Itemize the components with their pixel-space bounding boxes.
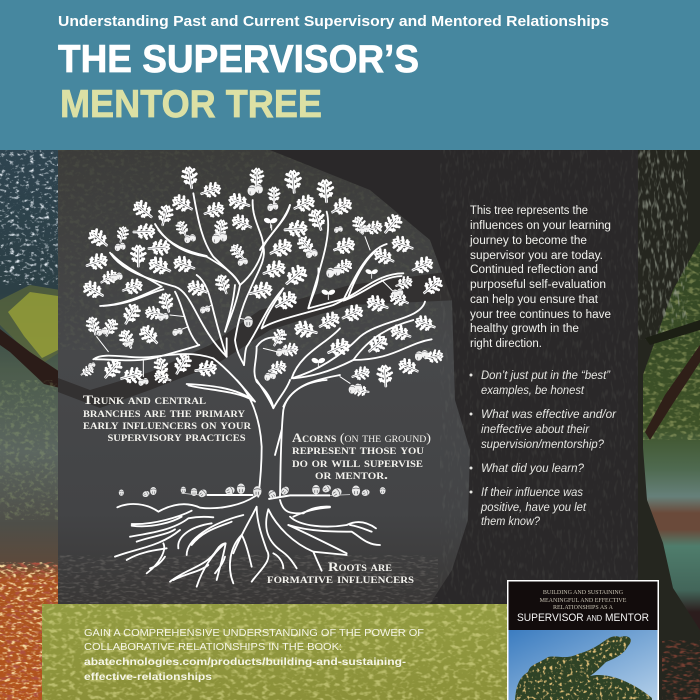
intro text block: This tree represents the <box>470 205 588 217</box>
reflection questions list: What did you learn? <box>481 463 585 475</box>
header band <box>0 0 700 150</box>
intro text block <box>469 205 611 350</box>
book cover: RELATIONSHIPS AS A <box>553 605 614 611</box>
book cover: SUPERVISOR AND MENTOR <box>517 612 649 624</box>
label: trunk and central branches <box>83 392 252 444</box>
label: acorns <box>292 430 431 482</box>
book cover: MEANINGFUL AND EFFECTIVE <box>540 598 627 604</box>
reflection questions list: ineffective about their <box>481 424 590 436</box>
tree illustration <box>78 166 445 587</box>
intro text block: healthy growth in the <box>470 323 579 335</box>
book cover: BUILDING AND SUSTAINING <box>543 590 624 596</box>
label: trunk and central branches: early influencers on your <box>83 417 252 432</box>
background photo: right forest edge <box>638 150 700 700</box>
call-to-action text: GAIN A COMPREHENSIVE UNDERSTANDING OF THE POWER OF <box>84 627 424 639</box>
call-to-action text <box>84 627 424 683</box>
roots <box>115 495 380 587</box>
reflection questions list: supervision/mentorship? <box>481 439 605 451</box>
reflection questions list: them know? <box>481 516 541 528</box>
call-to-action text: abatechnologies.com/products/building-and-sustaining- <box>84 656 407 668</box>
label: trunk and central branches: branches are the primary <box>83 405 246 420</box>
label: acorns: do or will supervise <box>292 455 423 470</box>
intro text block: purposeful self-evaluation <box>470 279 606 291</box>
label: roots: Roots are <box>328 559 392 574</box>
call-to-action text: effective-relationships <box>84 671 212 683</box>
intro text block: can help you ensure that <box>470 294 599 306</box>
intro text block: right direction. <box>470 338 542 350</box>
book cover tree photo <box>515 636 652 700</box>
label: acorns: represent those you <box>292 442 425 457</box>
background photo: left forest edge <box>0 150 60 700</box>
reflection questions list: Don’t just put in the “best” <box>481 370 611 382</box>
label: roots: formative influencers <box>267 571 414 586</box>
intro text block: your tree continues to have <box>470 309 611 321</box>
intro text block: influences on your learning <box>470 220 611 232</box>
label: trunk and central branches: supervisory practices <box>108 429 246 444</box>
intro text block: Continued reflection and <box>470 264 598 276</box>
reflection questions list: What was effective and/or <box>481 409 617 421</box>
label: acorns: or mentor. <box>315 467 388 482</box>
acorns in the canopy <box>88 183 430 395</box>
label: acorns: Acorns (on the ground) <box>292 430 431 445</box>
label: trunk and central branches: Trunk and central <box>83 392 206 407</box>
reflection questions list: positive, have you let <box>480 502 587 514</box>
subtitle: Understanding Past and Current Supervisory and Mentored Relationships <box>58 13 609 30</box>
intro text block: journey to become the <box>469 235 587 247</box>
branches and trunk <box>93 193 432 497</box>
oak leaves <box>78 166 445 397</box>
call-to-action panel <box>42 604 508 700</box>
title line 2: MENTOR TREE <box>60 83 322 126</box>
reflection questions list <box>470 370 617 528</box>
dark translucent panel over the forest <box>58 150 640 605</box>
reflection questions list: examples, be honest <box>481 385 585 397</box>
intro text block: supervisor you are today. <box>470 250 603 262</box>
reflection questions list: If their influence was <box>481 487 583 499</box>
book cover <box>507 580 659 700</box>
label: roots <box>267 559 414 586</box>
ground line and fallen acorns <box>119 483 386 500</box>
call-to-action text: COLLABORATIVE RELATIONSHIPS IN THE BOOK: <box>84 641 342 653</box>
title line 1: THE SUPERVISOR’S <box>58 38 419 81</box>
